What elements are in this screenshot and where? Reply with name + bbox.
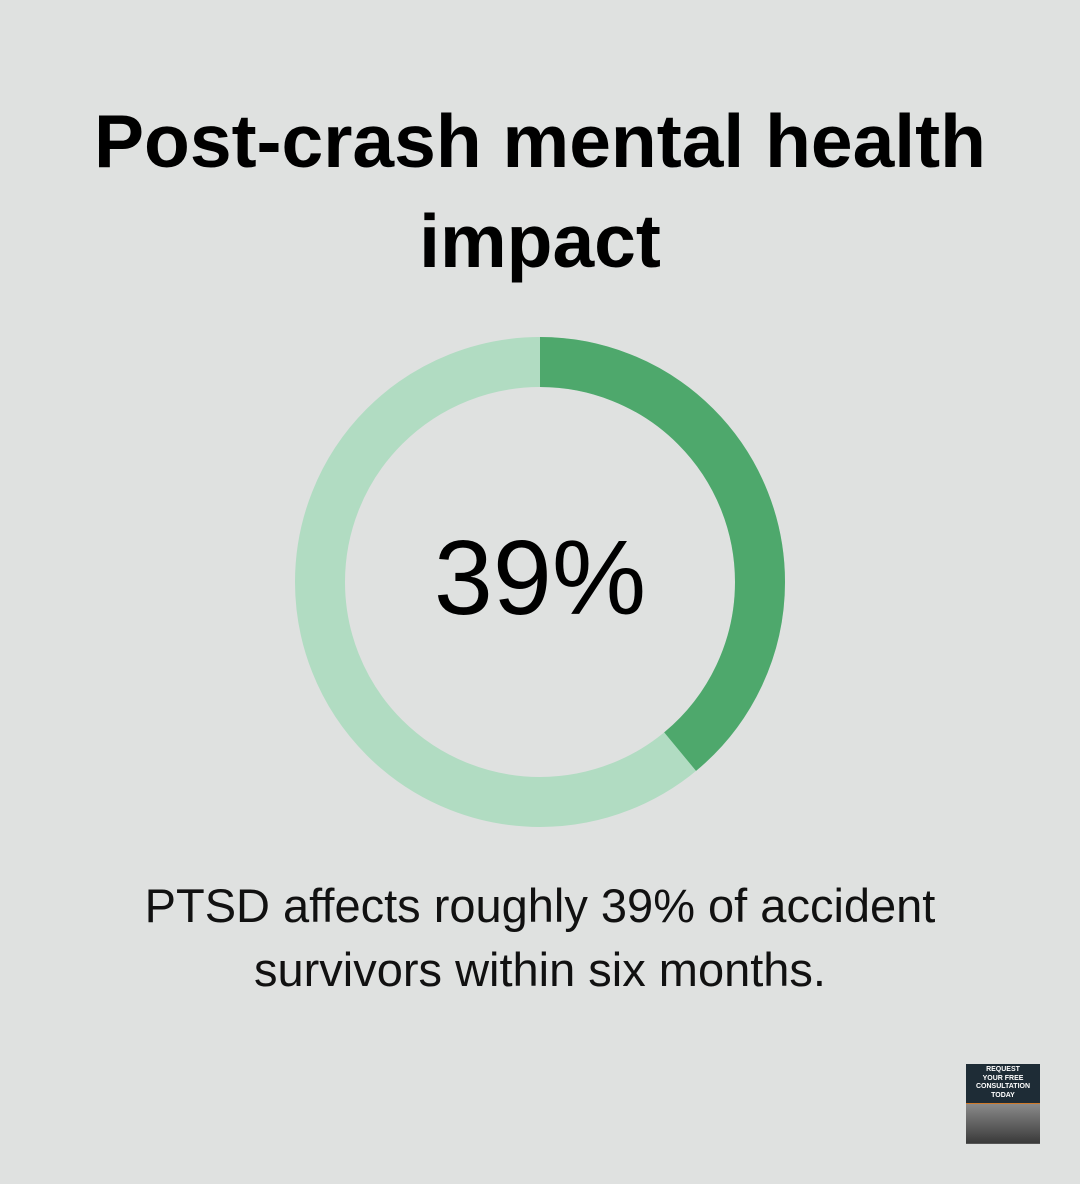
title: Post-crash mental health — [94, 99, 986, 183]
caption — [145, 879, 935, 996]
badge: consultation — [966, 1064, 1040, 1144]
badge: consultation: TODAY — [991, 1092, 1015, 1098]
caption: survivors within six months. — [254, 943, 826, 996]
title — [94, 99, 986, 283]
caption: PTSD affects roughly 39% of accident — [145, 879, 935, 932]
badge: consultation: REQUEST — [986, 1066, 1020, 1073]
title: impact — [419, 199, 661, 283]
donut chart: 39% — [434, 519, 646, 637]
badge: consultation: YOUR FREE — [983, 1074, 1023, 1082]
badge: consultation: CONSULTATION — [976, 1083, 1030, 1090]
